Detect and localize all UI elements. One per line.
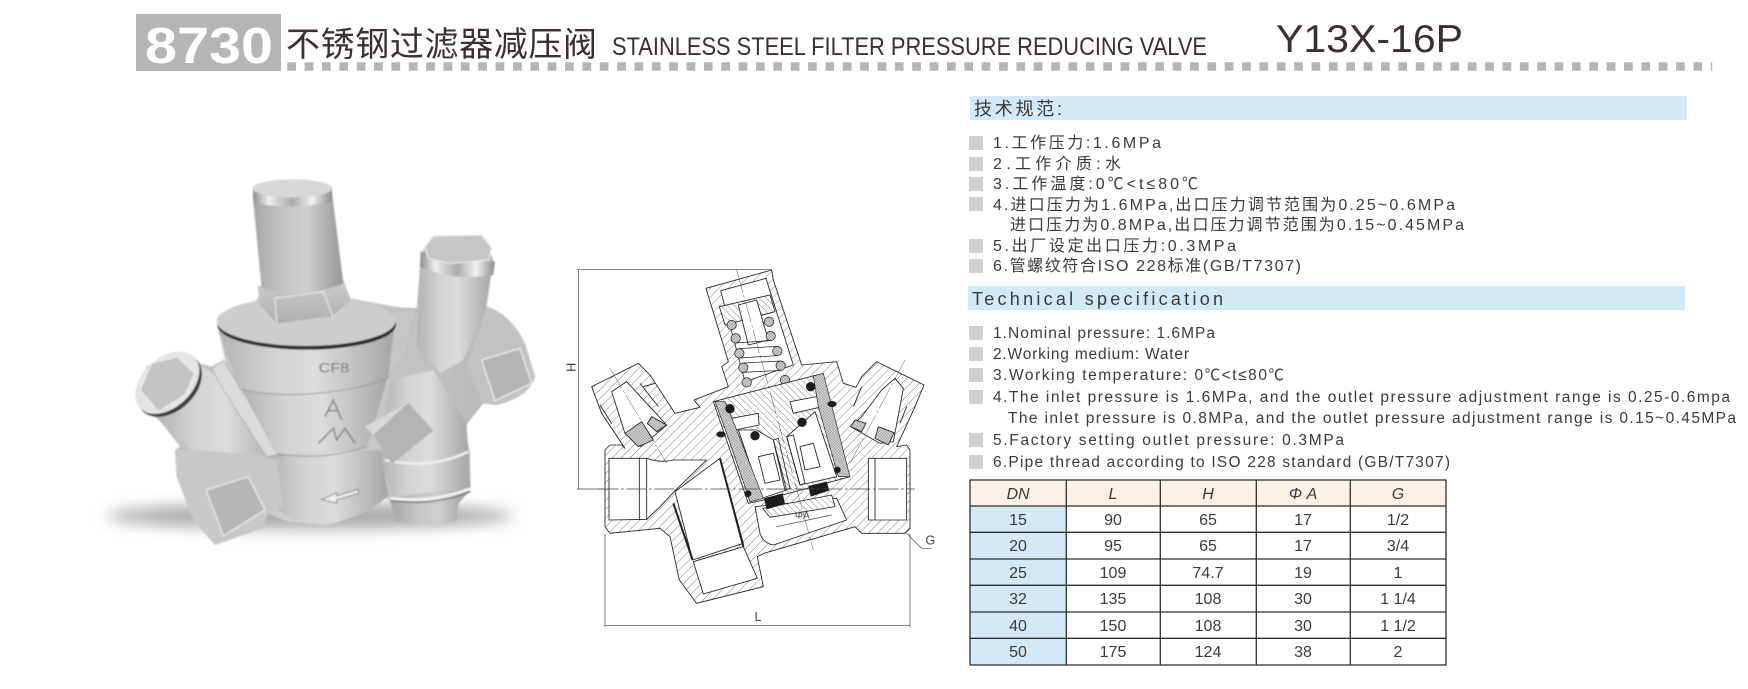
right plug hex — [425, 235, 492, 263]
adjuster cylinder — [253, 195, 343, 293]
adjuster — [719, 295, 775, 325]
specification lines: 5.Factory setting outlet pressure: 0.3MPa — [993, 432, 1344, 449]
table rows — [1009, 512, 1416, 661]
header band — [136, 14, 1712, 74]
bullet markers — [969, 326, 983, 469]
sectional drawing — [564, 269, 935, 627]
dimension labels: L — [754, 610, 762, 624]
inner white chambers — [732, 413, 759, 430]
hex nut — [258, 279, 351, 323]
dimension labels: H — [564, 363, 578, 372]
table rows: 2 — [1394, 644, 1403, 661]
specification lines: 2.Working medium: Water — [993, 346, 1189, 363]
model number badge: 8730 — [145, 17, 273, 74]
table rows: 150 — [1100, 618, 1126, 635]
specification lines: 2.工作介质:水 — [993, 155, 1121, 173]
table rows: 19 — [1294, 565, 1312, 582]
heading bar — [968, 286, 1685, 310]
left bore — [609, 458, 707, 520]
table rows: 3/4 — [1387, 538, 1409, 555]
table header — [1006, 486, 1404, 503]
table rows: 65 — [1199, 512, 1217, 529]
table header: L — [1109, 486, 1117, 503]
table rows: 15 — [1009, 512, 1027, 529]
table fills — [970, 480, 1446, 506]
table rows: 1 1/2 — [1380, 618, 1416, 635]
right lower leg — [380, 370, 470, 497]
table rows: 32 — [1009, 591, 1027, 608]
table header: DN — [1006, 486, 1030, 503]
piston cartridge — [713, 375, 850, 503]
table rows: 135 — [1100, 591, 1126, 608]
dimensions table — [970, 480, 1446, 665]
heading bar: Technical specification — [972, 289, 1223, 309]
table header: G — [1392, 486, 1404, 503]
table rows: 40 — [1009, 618, 1027, 635]
specification lines: 5.出厂设定出口压力:0.3MPa — [993, 237, 1236, 255]
table rows: 95 — [1104, 538, 1122, 555]
table grid — [970, 480, 1446, 665]
left plug detail — [600, 382, 667, 447]
spring coils — [727, 317, 790, 387]
center upper ring — [218, 320, 395, 395]
specification lines: 进口压力为0.8MPa,出口压力调节范围为0.15~0.45MPa — [1010, 216, 1464, 234]
table rows: 38 — [1294, 644, 1312, 661]
table rows: 90 — [1104, 512, 1122, 529]
right plug band — [420, 252, 495, 277]
disc top — [217, 300, 396, 350]
table rows: 30 — [1294, 618, 1312, 635]
table rows: 108 — [1195, 591, 1221, 608]
left web rib — [212, 360, 283, 457]
inlet flat — [206, 477, 265, 536]
specification lines: 1.工作压力:1.6MPa — [993, 134, 1161, 152]
table rows: 65 — [1199, 538, 1217, 555]
table rows: 17 — [1294, 512, 1312, 529]
left plug — [123, 339, 214, 429]
right plug detail — [851, 378, 907, 445]
table rows: 25 — [1009, 565, 1027, 582]
casting mark CF8: CF8 — [319, 360, 350, 376]
specification lines — [993, 325, 1736, 471]
specification lines: 3.工作温度:0℃<t≤80℃ — [993, 175, 1198, 193]
right tube highlight — [417, 267, 492, 373]
table header: Φ A — [1289, 486, 1317, 503]
table rows: 1 1/4 — [1380, 591, 1416, 608]
body silhouette with hatching — [592, 270, 924, 603]
photo shadow — [107, 503, 513, 529]
left angled tube — [155, 367, 283, 457]
strainer cavity — [675, 458, 743, 560]
right web rib — [387, 308, 417, 380]
panel: english technical specification — [968, 286, 1736, 471]
right bore — [868, 458, 907, 520]
lower chamber — [755, 498, 847, 545]
table header: H — [1202, 486, 1214, 503]
model code: Y13X-16P — [1276, 18, 1463, 61]
table rows: 124 — [1195, 644, 1221, 661]
bottom cap — [390, 488, 472, 525]
dimension labels: G — [925, 533, 935, 547]
table rows: 108 — [1195, 618, 1221, 635]
lower bowl — [267, 450, 388, 525]
table rows: 30 — [1294, 591, 1312, 608]
heading bar — [970, 96, 1687, 120]
outlet flat — [482, 348, 532, 401]
left inlet — [175, 450, 283, 545]
strainer cap recess — [693, 547, 757, 594]
black seals — [716, 382, 841, 509]
valve silhouette — [138, 193, 535, 545]
dimension lines — [577, 269, 932, 627]
table rows: 74.7 — [1192, 565, 1224, 582]
english title: STAINLESS STEEL FILTER PRESSURE REDUCING VALVE — [612, 33, 1207, 61]
table rows: 20 — [1009, 538, 1027, 555]
product photo: stainless valve — [107, 179, 535, 545]
dimension labels: ΦA — [795, 510, 810, 521]
panel: chinese technical specification — [969, 96, 1687, 275]
specification lines: 6.Pipe thread according to ISO 228 standard (GB/T7307) — [993, 454, 1450, 471]
specification lines: 6.管螺纹符合ISO 228标准(GB/T7307) — [993, 257, 1301, 275]
dotted rule — [287, 62, 1712, 71]
right outlet shading — [467, 307, 535, 405]
table rows: 109 — [1100, 565, 1126, 582]
table rows: 175 — [1100, 644, 1126, 661]
dimension labels — [564, 363, 935, 624]
table rows: 1 — [1394, 565, 1403, 582]
specification lines: 4.The inlet pressure is 1.6MPa, and the outlet pressure adjustment range is 0.25-0.6mpa — [993, 389, 1730, 406]
specification lines: The inlet pressure is 0.8MPa, and the outlet pressure adjustment range is 0.15~0.45MPa — [1008, 410, 1736, 427]
middle hex plug — [373, 403, 433, 464]
spring column bore — [721, 278, 793, 382]
specification lines: 4.进口压力为1.6MPa,出口压力调节范围为0.25~0.6MPa — [993, 196, 1455, 214]
specification lines — [993, 134, 1464, 275]
table rows: 50 — [1009, 644, 1027, 661]
logo mark — [318, 400, 355, 443]
table rows: 1/2 — [1387, 512, 1409, 529]
heading bar: 技术规范: — [974, 99, 1062, 119]
cross-hatched sleeves — [715, 402, 763, 502]
bullet markers — [969, 136, 983, 273]
specification lines: 1.Nominal pressure: 1.6MPa — [993, 325, 1215, 342]
flow arrow — [322, 489, 358, 503]
chinese title: 不锈钢过滤器减压阀 — [286, 17, 597, 66]
chrome top band — [253, 188, 332, 206]
center lower column — [240, 375, 388, 455]
specification lines: 3.Working temperature: 0℃<t≤80℃ — [993, 367, 1284, 384]
table rows: 17 — [1294, 538, 1312, 555]
valve seat — [763, 495, 835, 517]
